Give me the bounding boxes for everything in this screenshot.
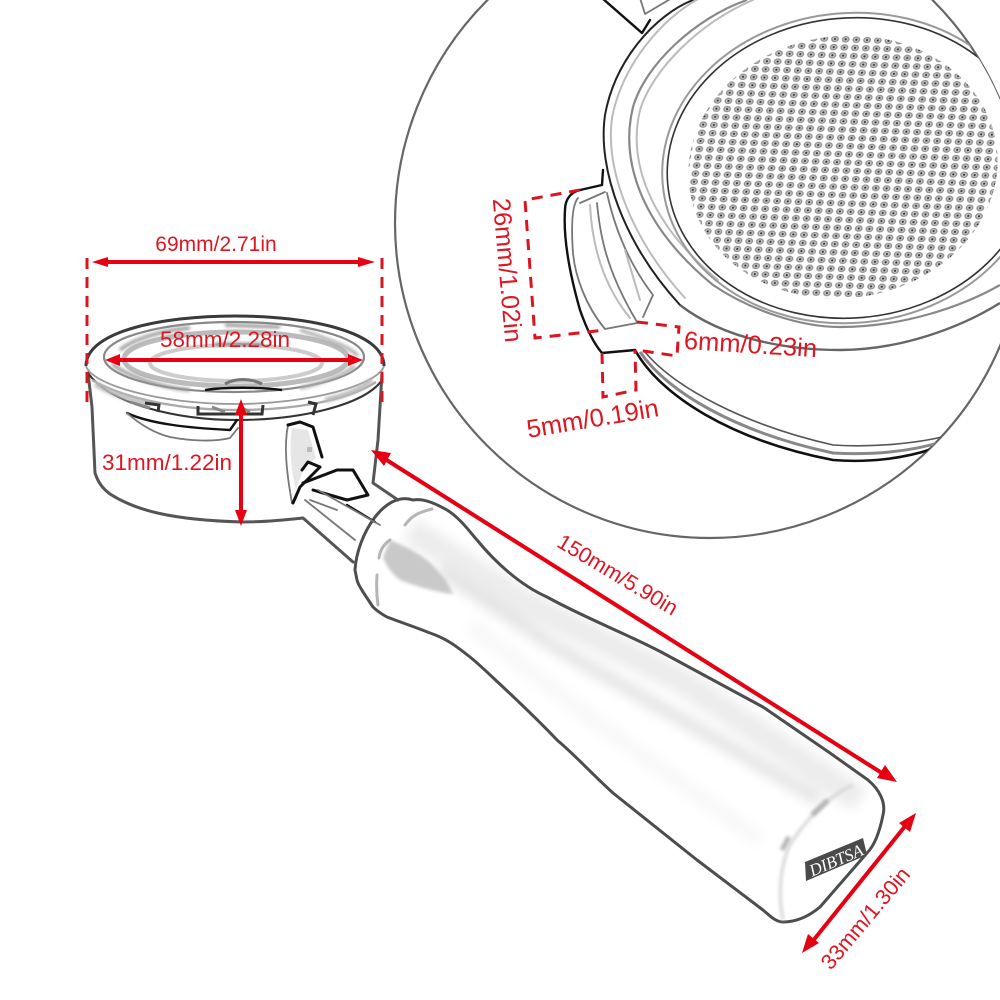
left lug <box>127 413 238 441</box>
rim tabs <box>130 402 316 415</box>
dimension: 69mm rim width: 69mm/2.71in <box>155 233 277 256</box>
dimension: 33mm handle end: 33mm/1.30in <box>815 862 915 974</box>
dimension: 150mm length: 150mm/5.90in <box>553 530 682 620</box>
dimension: 26mm ear height <box>487 190 605 344</box>
dimension: 58mm inner diameter: 58mm/2.28in <box>160 327 290 352</box>
stippled reflection <box>383 540 453 594</box>
rim <box>86 316 384 420</box>
dimension: 69mm rim width <box>87 233 382 405</box>
top bracket <box>602 0 672 33</box>
spout bracket <box>286 422 380 540</box>
outer lower body edge <box>635 350 960 461</box>
dimension: 26mm ear height: 26mm/1.02in <box>487 197 527 344</box>
dimension: 31mm basket height: 31mm/1.22in <box>102 450 232 475</box>
collar lines <box>377 509 432 605</box>
dimension: 33mm handle end <box>802 813 916 974</box>
dimension: 6mm ear thickness: 6mm/0.23in <box>683 327 818 363</box>
portafilter handle <box>355 499 884 922</box>
left ear tab <box>565 170 653 353</box>
logo badge DIBTSA: DIBTSA <box>805 840 867 881</box>
inset magnifier circle <box>395 0 1000 538</box>
perforated disk edge <box>661 12 1000 324</box>
basket body <box>88 373 398 562</box>
dimension: 150mm length <box>371 450 897 782</box>
inset: filter basket close-up <box>565 0 1000 461</box>
dimension: 6mm ear thickness <box>637 322 818 363</box>
dimension: 5mm ear width <box>525 350 661 444</box>
end cap arc <box>780 785 853 920</box>
perforation holes <box>688 36 998 298</box>
dimension: 31mm basket height <box>102 399 247 526</box>
dimension: 58mm inner diameter <box>105 327 363 366</box>
outer rim ring <box>604 0 1000 350</box>
handle shading <box>410 530 860 840</box>
handle outline <box>355 499 884 922</box>
portafilter basket <box>86 316 398 562</box>
dimension: 5mm ear width: 5mm/0.19in <box>525 394 661 444</box>
